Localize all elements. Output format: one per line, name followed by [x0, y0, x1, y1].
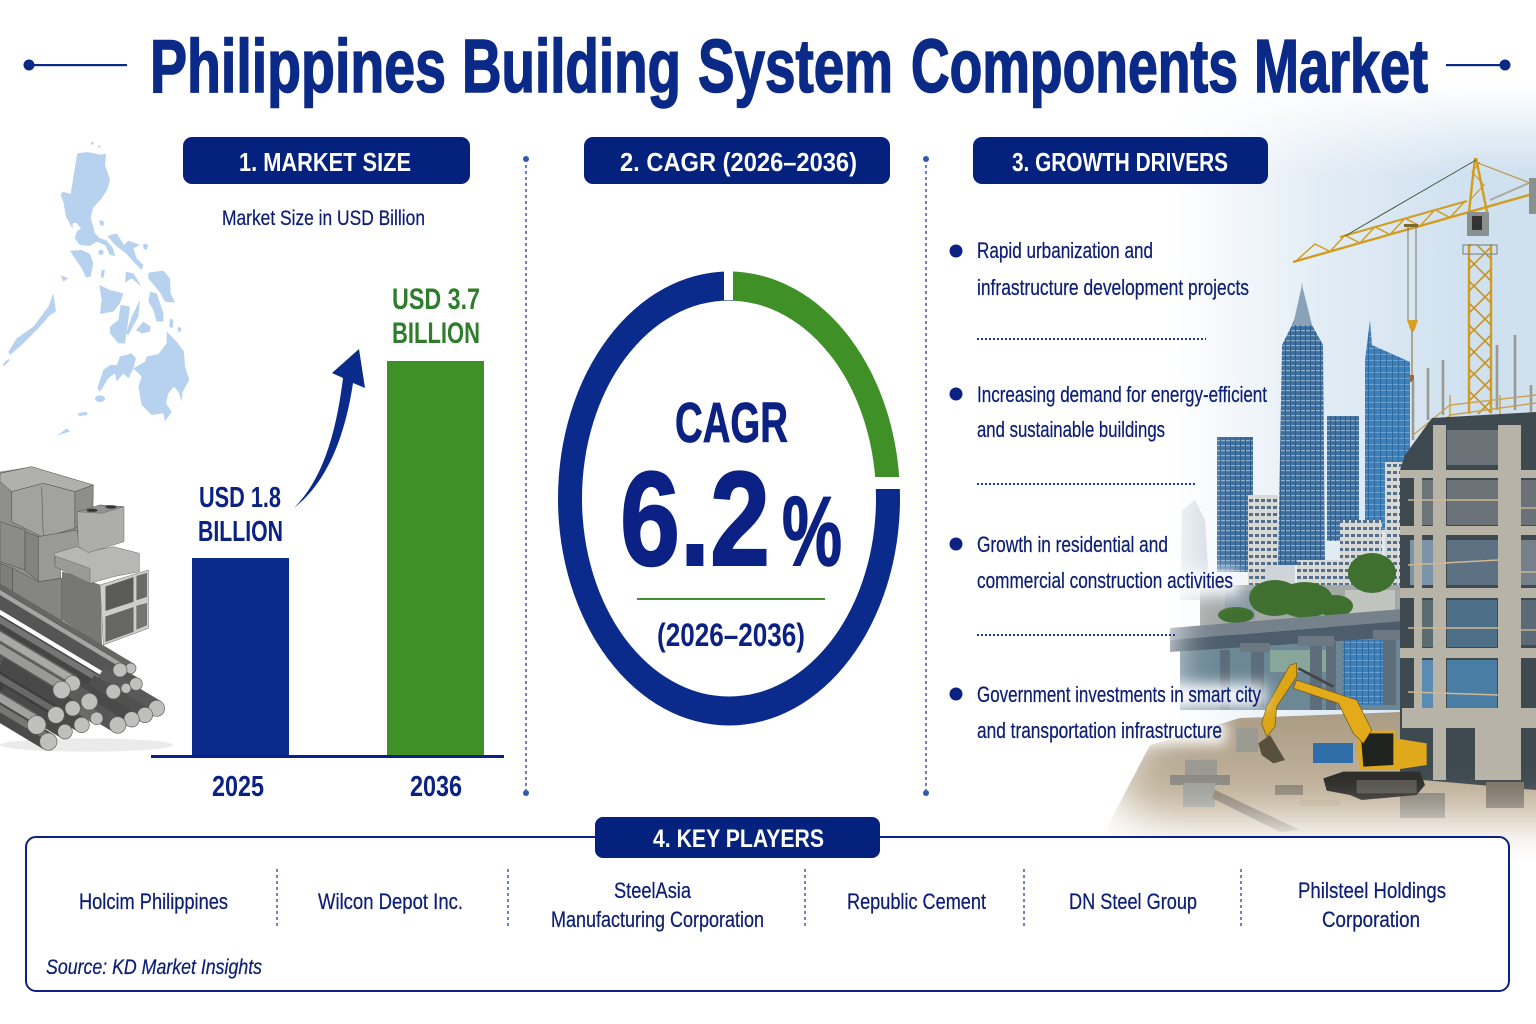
title: Market	[1254, 24, 1428, 108]
heading: key players	[595, 817, 880, 858]
driver: construction: commercial construction activities	[977, 568, 1233, 593]
donut chart: CAGR ring	[558, 265, 914, 726]
divider: market size and CAGR	[523, 156, 529, 796]
hollow blocks	[54, 505, 148, 645]
panel: growth drivers	[950, 137, 1268, 743]
driver: energy efficiency: and sustainable buildings	[977, 417, 1165, 442]
panel: market size	[151, 137, 504, 803]
illustration: sky	[1170, 85, 1536, 725]
driver: construction: Growth in residential and	[977, 532, 1168, 557]
title: Building	[462, 24, 681, 108]
ground	[1109, 712, 1536, 849]
bar chart: USD 1.8	[199, 482, 281, 514]
crane	[1293, 158, 1536, 414]
company: Wilcon Depot Inc.: Wilcon Depot Inc.	[318, 889, 463, 914]
driver: construction	[950, 532, 1233, 593]
driver: government investment: Government investments in smart city	[977, 682, 1261, 707]
title: Philippines	[150, 24, 446, 108]
driver: urbanization	[950, 238, 1249, 300]
company: SteelAsia Manufacturing Corporation: Manufacturing Corporation	[551, 907, 764, 932]
CAGR value: %	[782, 476, 842, 586]
bar chart: 2036	[410, 771, 462, 803]
company: DN Steel Group: DN Steel Group	[1069, 889, 1197, 914]
company: Philsteel Holdings Corporation: Corporation	[1322, 907, 1420, 932]
illustration: concrete blocks and steel rebar	[0, 467, 173, 752]
chart subtitle: Market Size in USD Billion	[222, 207, 425, 230]
driver: energy efficiency	[950, 382, 1267, 442]
title	[24, 24, 1510, 108]
driver: urbanization: Rapid urbanization and	[977, 238, 1153, 263]
bar chart: 2025	[212, 771, 264, 803]
heading: market size: 1. MARKET SIZE	[239, 147, 411, 177]
company: SteelAsia Manufacturing Corporation: SteelAsia	[614, 878, 692, 903]
company: Philsteel Holdings Corporation	[1298, 878, 1446, 932]
heading: CAGR: 2. CAGR (2026–2036)	[620, 147, 857, 177]
company: Republic Cement: Republic Cement	[847, 889, 986, 914]
bridge background water and towers	[1180, 635, 1410, 710]
excavator	[1258, 663, 1427, 800]
CAGR value	[620, 391, 842, 653]
driver: energy efficiency: Increasing demand for energy-efficient	[977, 382, 1267, 407]
company: SteelAsia Manufacturing Corporation	[551, 878, 764, 932]
company: Holcim Philippines: Holcim Philippines	[79, 889, 228, 914]
panel: key players	[26, 817, 1509, 991]
trees	[1218, 553, 1396, 623]
heading: CAGR	[584, 137, 890, 184]
divider: CAGR and growth drivers	[923, 156, 929, 796]
illustration: construction site and skyline	[1090, 158, 1536, 860]
heading: growth drivers: 3. GROWTH DRIVERS	[1012, 147, 1228, 177]
bar chart: USD 3.7	[392, 283, 480, 316]
building under construction	[1400, 335, 1536, 830]
concrete block wall	[0, 467, 93, 622]
driver: urbanization: infrastructure development projects	[977, 275, 1249, 300]
arrow: growth	[294, 349, 365, 508]
heading: key players: 4. KEY PLAYERS	[653, 825, 824, 853]
CAGR value: 6.2	[620, 445, 770, 594]
bar chart	[151, 283, 504, 803]
illustration: Philippines map	[3, 142, 189, 436]
CAGR value: CAGR	[675, 391, 788, 455]
skyline towers	[1180, 282, 1415, 627]
driver: government investment: and transportation infrastructure	[977, 718, 1222, 743]
title: System	[698, 24, 893, 108]
steel rebar bundle	[0, 567, 173, 752]
company: Philsteel Holdings Corporation: Philsteel Holdings	[1298, 878, 1446, 903]
title: Components	[911, 24, 1238, 108]
heading: market size	[183, 137, 470, 184]
elevated bridge	[1170, 608, 1415, 710]
panel: CAGR	[558, 137, 914, 726]
driver: government investment	[950, 682, 1261, 743]
bar chart: BILLION	[392, 317, 480, 350]
bar chart: BILLION	[198, 516, 283, 548]
CAGR value: (2026–2036)	[657, 617, 805, 653]
heading: growth drivers	[973, 137, 1268, 184]
source note: Source: KD Market Insights	[46, 956, 262, 979]
